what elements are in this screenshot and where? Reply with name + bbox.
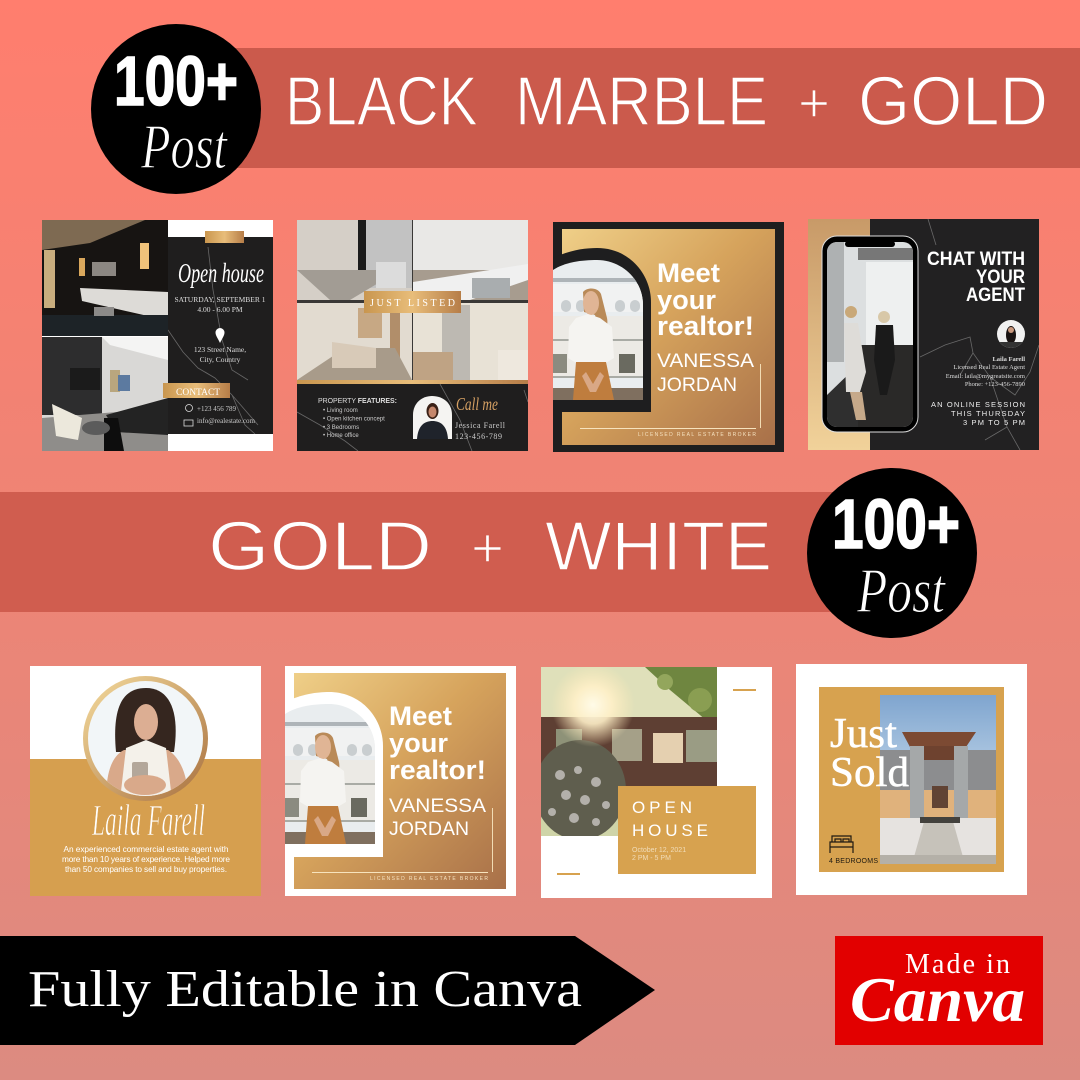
top banner (225, 48, 1080, 168)
heading: gold + white: + (471, 516, 504, 579)
panel: just sold card: Sold (830, 750, 909, 796)
panel: meet your realtor marble card: LICENSED REAL ESTATE BROKER (638, 432, 756, 438)
panel: just listed marble card: Call me (456, 394, 498, 414)
badge: 100+ post middle (807, 468, 977, 638)
panel: open house marble card: SATURDAY, SEPTEMBER 1 (174, 295, 266, 304)
panel: just listed marble card: PROPERTY FEATURES: (318, 398, 397, 405)
panel: just listed marble card: • Open kitchen concept (323, 416, 385, 422)
panel: just listed marble card: • Home office (323, 433, 359, 439)
panel: chat with your agent card: CHAT WITH (927, 249, 1025, 270)
panel: meet your realtor white card: JORDAN (389, 819, 469, 840)
panel: just listed marble card: • Living room (323, 408, 358, 414)
logo: made in canva: Canva (850, 964, 1025, 1035)
panel: meet your realtor white card: Meet (389, 701, 452, 731)
panel: open house white card: 2 PM - 5 PM (632, 855, 671, 862)
panel: laila farell profile card: more than 10 years of experience. Helped more (62, 854, 230, 864)
panel: just listed marble card: • 3 Bedrooms (323, 425, 359, 431)
icon: location pin (216, 328, 224, 343)
panel: chat with your agent card: YOUR (976, 267, 1025, 288)
ribbon: fully editable in canva: Fully Editable in Canva (28, 961, 582, 1018)
panel: laila farell profile card (30, 666, 261, 896)
panel: open house marble card: +123 456 789 (197, 405, 236, 413)
panel: just listed marble card: JUST LISTED (370, 298, 455, 309)
panel: meet your realtor white card: VANESSA (389, 796, 486, 817)
logo: made in canva: Made in (905, 949, 1010, 980)
panel: just sold card: Just (830, 711, 897, 757)
panel: open house marble card: CONTACT (176, 388, 220, 398)
panel: open house white card: October 12, 2021 (632, 847, 686, 854)
photo: agent portrait (85, 680, 207, 800)
panel: chat with your agent card: THIS THURSDAY (951, 409, 1025, 418)
panel: just listed marble card (297, 220, 528, 451)
panel: chat with your agent card: Phone: +123-456-7890 (965, 381, 1025, 388)
panel: chat with your agent card: Laila Farell (992, 356, 1025, 363)
panel: chat with your agent card: AGENT (966, 285, 1025, 306)
badge: 100+ post top: 100+ (114, 42, 238, 120)
badge: 100+ post top (91, 24, 261, 194)
panel: meet your realtor white card: LICENSED REAL ESTATE BROKER (370, 876, 488, 882)
panel: laila farell profile card: than 50 companies to sell and buy properties. (65, 864, 227, 874)
heading: black marble + gold: GOLD (858, 62, 1048, 140)
heading: black marble + gold: BLACK (285, 62, 478, 140)
heading: gold + white: WHITE (545, 507, 772, 585)
agent photo (413, 396, 452, 439)
panel: meet your realtor white card: realtor! (389, 755, 486, 785)
panel: chat with your agent card: 3 PM TO 5 PM (963, 418, 1025, 427)
photo: bathroom and living room (42, 220, 168, 451)
panel: chat with your agent card: Licensed Real Estate Agent (953, 364, 1025, 371)
panel: meet your realtor marble card: JORDAN (657, 375, 737, 396)
agent avatar (997, 320, 1025, 348)
panel: just listed marble card: 123-456-789 (455, 432, 502, 441)
panel: meet your realtor marble card: realtor! (657, 311, 754, 341)
logo: made in canva (835, 936, 1043, 1045)
photo collage (297, 220, 528, 380)
panel: open house marble card: info@realestate.com (197, 417, 256, 425)
panel: meet your realtor marble card: VANESSA (657, 351, 754, 372)
panel: meet your realtor white card (285, 666, 516, 896)
panel: chat with your agent card (808, 219, 1039, 450)
panel: just listed marble card: Jessica Farell (455, 421, 506, 430)
heading: gold + white: GOLD (208, 507, 432, 585)
icon: phone mockup (822, 236, 918, 432)
panel: open house white card: OPEN (632, 798, 692, 817)
panel: laila farell profile card: An experienced commercial estate agent with (64, 844, 229, 854)
panel: chat with your agent card: Email: laila@mygreatsite.com (946, 373, 1025, 380)
panel: open house white card: HOUSE (632, 821, 708, 840)
badge: 100+ post middle: 100+ (832, 485, 960, 563)
photo: sunlit house (534, 663, 717, 840)
panel: meet your realtor marble card (553, 222, 784, 452)
panel: open house marble card: 4.00 - 6.00 PM (197, 305, 243, 314)
panel: open house marble card (42, 220, 273, 451)
panel: open house marble card: 123 Street Name, (194, 345, 246, 354)
heading: black marble + gold (285, 62, 1048, 140)
panel: meet your realtor white card: your (389, 728, 448, 758)
heading: black marble + gold: + (798, 71, 830, 134)
panel: open house marble card: City, Country (200, 355, 241, 364)
panel: just sold card: 4 BEDROOMS (829, 858, 878, 865)
panel: chat with your agent card: AN ONLINE SESSION (931, 400, 1025, 409)
panel: just sold card (796, 664, 1027, 895)
badge: 100+ post top: Post (140, 111, 229, 182)
panel: open house white card (534, 663, 772, 898)
photo: modern house (880, 695, 996, 864)
middle banner (0, 492, 840, 612)
panel: laila farell profile card: Laila Farell (91, 796, 205, 845)
icon: bed (830, 836, 853, 853)
panel: meet your realtor marble card: Meet (657, 258, 720, 288)
heading: black marble + gold: MARBLE (515, 62, 768, 140)
panel: meet your realtor marble card: your (657, 285, 716, 315)
ribbon: fully editable in canva (0, 936, 655, 1045)
badge: 100+ post middle: Post (856, 555, 947, 626)
heading: gold + white (208, 507, 772, 585)
panel: open house marble card: Open house (178, 258, 264, 288)
